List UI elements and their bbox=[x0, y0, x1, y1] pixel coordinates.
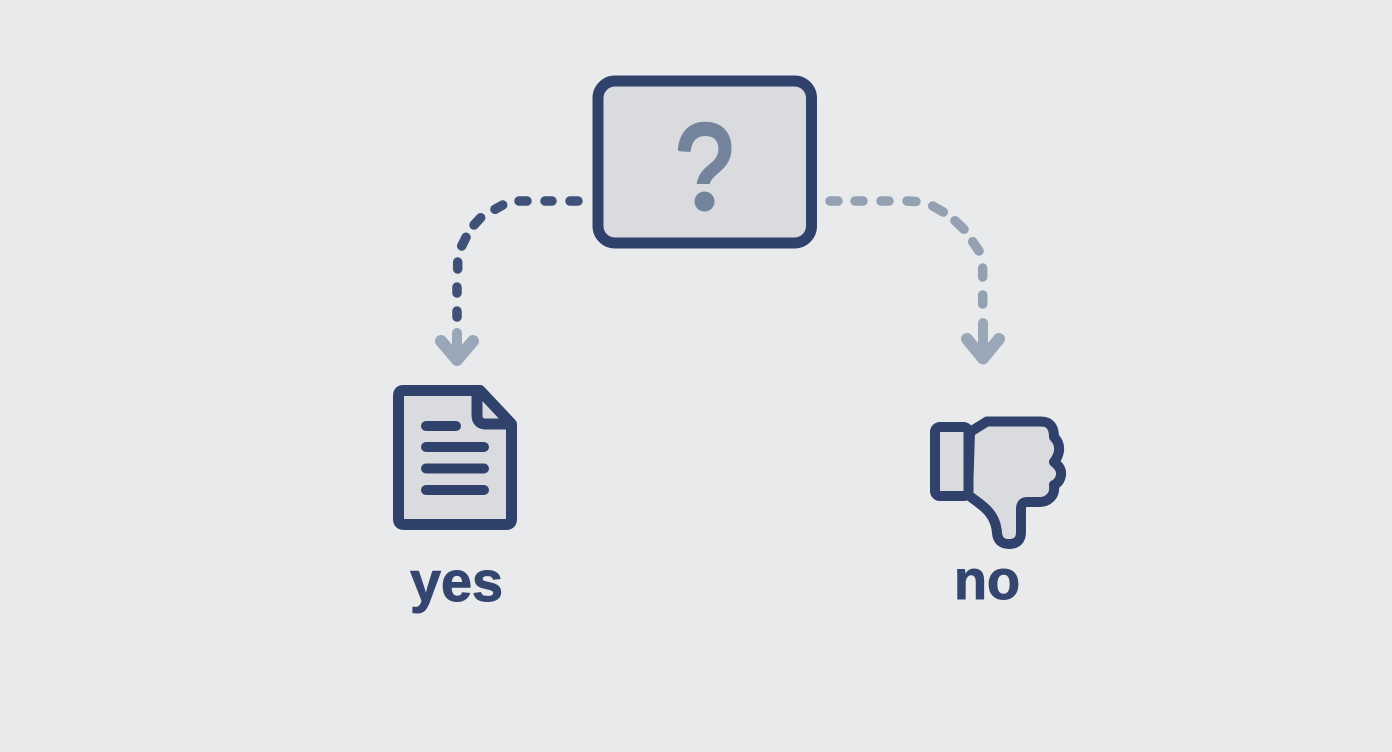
question mark: ? bbox=[676, 99, 733, 238]
document icon bbox=[398, 390, 512, 524]
yes label: yes bbox=[410, 550, 503, 614]
dashed arrow to yes bbox=[441, 201, 578, 360]
thumbs down icon bbox=[935, 422, 1061, 544]
question box bbox=[598, 81, 812, 243]
dashed arrow to no bbox=[830, 201, 999, 358]
decision flow diagram bbox=[393, 76, 1066, 614]
no label: no bbox=[954, 548, 1020, 611]
question mark bbox=[678, 122, 732, 212]
